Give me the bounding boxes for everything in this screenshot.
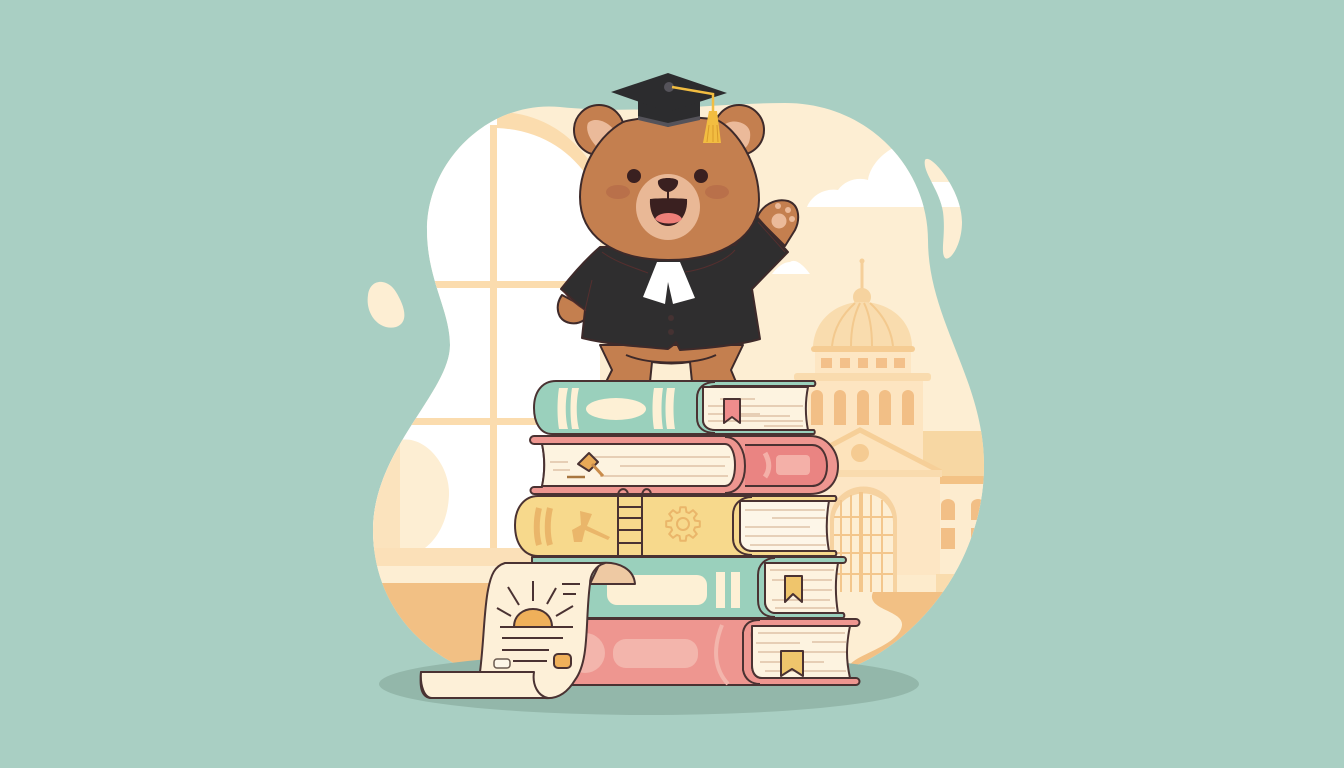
sun emblem (497, 581, 573, 627)
book 4 teal (532, 557, 846, 618)
head (580, 117, 759, 260)
crescent accent right (924, 158, 962, 259)
window panes (370, 110, 600, 550)
left hand (558, 295, 590, 323)
belly line (626, 355, 716, 362)
scroll lower curl (421, 672, 548, 698)
tassel (664, 82, 721, 143)
background scene blob (373, 103, 984, 664)
judge robe (561, 217, 788, 350)
face (606, 169, 729, 240)
gavel on pages (567, 453, 603, 477)
ears (574, 105, 764, 155)
book 2 pink (530, 436, 838, 494)
capitol building (794, 258, 986, 592)
graduation cap (611, 73, 727, 143)
book 1 teal (534, 381, 815, 434)
small cream blob left (368, 282, 404, 328)
scroll sheet (421, 563, 605, 698)
white collar bib (643, 262, 695, 304)
legs (600, 345, 743, 382)
stamp outline (494, 659, 510, 668)
embossed gavel (572, 511, 610, 542)
bear (558, 105, 798, 382)
book 3 yellow (515, 496, 836, 556)
embossed gear (666, 507, 700, 541)
scroll flap (590, 563, 635, 584)
book stack (515, 381, 860, 685)
ladder (618, 489, 651, 556)
seal (554, 654, 571, 668)
window sill and curtain (373, 440, 532, 663)
diploma scroll (421, 563, 635, 698)
book 5 pink (560, 619, 860, 685)
winding path (851, 592, 943, 664)
document lines (500, 584, 580, 661)
ground shadow (379, 653, 919, 715)
waving paw (757, 200, 798, 246)
clouds (772, 148, 924, 274)
